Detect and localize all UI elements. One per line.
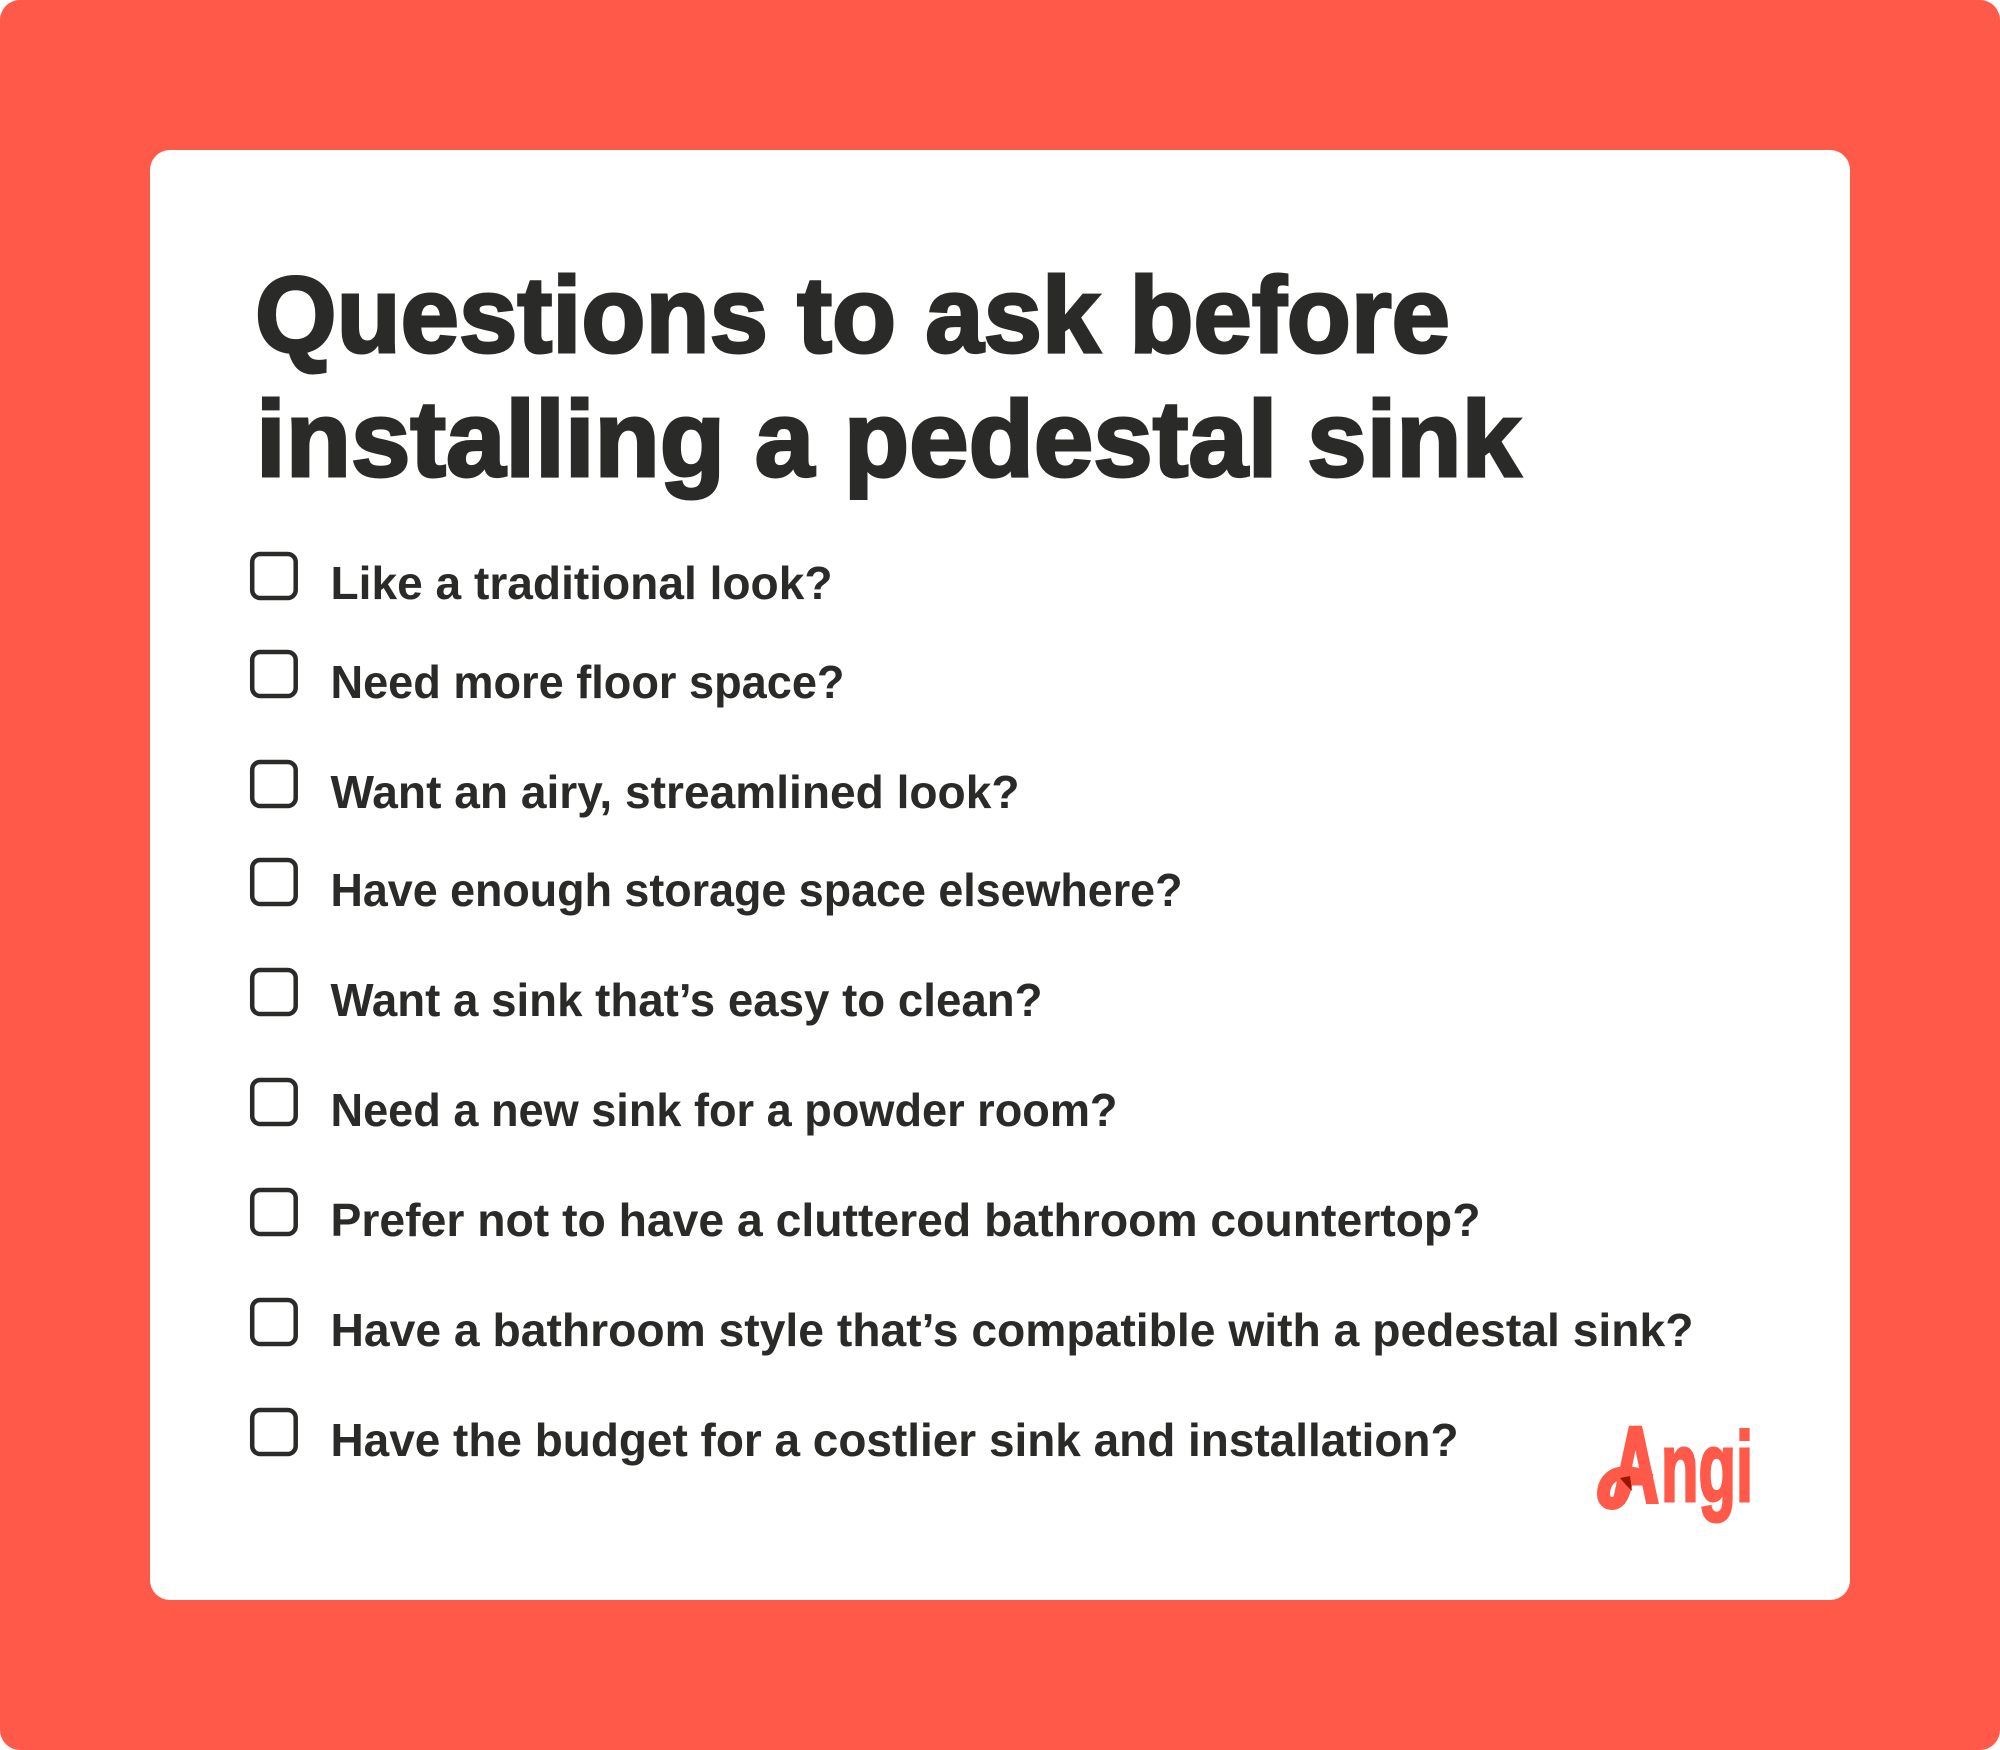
logo: Angi: A <box>1613 1407 1658 1524</box>
title: Questions to ask before <box>255 254 1450 375</box>
item 5: easy to clean: Want a sink that’s easy to clean? <box>330 974 1042 1026</box>
item 4: storage space: Have enough storage space elsewhere? <box>330 864 1182 916</box>
checklist <box>252 554 1694 1466</box>
item 2: floor space: Need more floor space? <box>330 656 844 708</box>
item 9: budget: Have the budget for a costlier sink and installation? <box>330 1414 1458 1466</box>
item 3: airy look: Want an airy, streamlined look? <box>330 766 1020 818</box>
item 8: bathroom style: Have a bathroom style that’s compatible with a pedestal sink? <box>330 1304 1694 1356</box>
title: installing a pedestal sink <box>256 378 1522 499</box>
item 6: powder room: Need a new sink for a powder room? <box>330 1084 1118 1136</box>
item 7: countertop: Prefer not to have a cluttered bathroom countertop? <box>330 1194 1480 1246</box>
title <box>255 254 1522 499</box>
item 1: traditional look: Like a traditional look? <box>330 557 832 609</box>
logo: Angi: ngi <box>1661 1412 1753 1522</box>
logo: Angi <box>1604 1407 1753 1524</box>
panel: white checklist card <box>150 150 1850 1600</box>
